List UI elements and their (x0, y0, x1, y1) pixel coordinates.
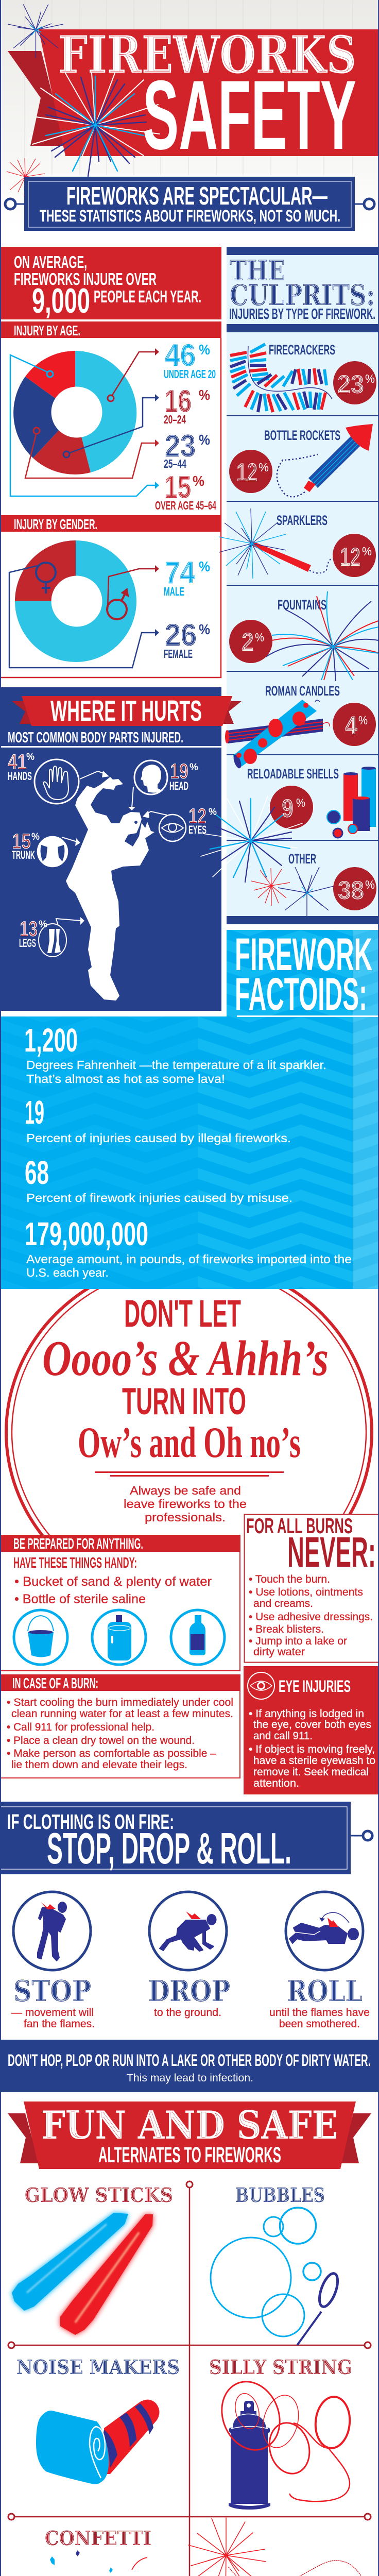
badge: 12 percent sparklers: 12 (340, 543, 360, 571)
panel: in case of a burn: • Place a clean dry towel on the wound. (7, 1735, 195, 1747)
panel: on average stat: FIREWORKS INJURE OVER (14, 269, 157, 289)
heading: firework factoids (235, 928, 379, 1020)
factoid: 68 (25, 1154, 292, 1205)
badge: 4 percent: 4 (345, 711, 357, 740)
stat: 15 percent over age 45-64: OVER AGE 45–64 (155, 499, 216, 512)
icon: reloadable shell burst across panels (201, 796, 302, 882)
panel: dirty water warning: This may lead to infection. (127, 2072, 253, 2084)
ribbon: where it hurts: WHERE IT HURTS (50, 694, 202, 727)
panel: on average stat: ON AVERAGE, (14, 252, 87, 272)
panel: injury by age and gender (1, 321, 221, 677)
label: sparklers: SPARKLERS (277, 513, 328, 528)
stat: 16 percent 20-24: % (199, 387, 210, 403)
icon: roman candles (225, 700, 330, 769)
heading: injury by age (1, 321, 221, 338)
callout: eyes 12 percent: EYES (188, 823, 206, 836)
alternative: sparkler finale fireworks (173, 2518, 376, 2576)
banner: stop drop and roll (1, 1802, 372, 1874)
icon: red burst (188, 2518, 266, 2576)
badge: 4 percent: % (358, 714, 368, 727)
alternative: bubbles (211, 2183, 341, 2345)
callout: legs 13 percent: % (39, 919, 47, 930)
stat: 23 percent 25-44: % (199, 432, 210, 448)
panel: on average stat: 9,000 (32, 281, 90, 320)
panel: in case of a burn: • Call 911 for professional help. (7, 1721, 154, 1733)
professionals advice: professionals. (145, 1511, 226, 1524)
alternative: glow sticks: GLOW STICKS (25, 2183, 173, 2207)
icon: sparkler (219, 509, 332, 579)
step: drop: DROP (148, 1974, 230, 2008)
callout: head 19 percent: 19 (170, 759, 188, 783)
badge: 12 percent rockets: 12 (236, 458, 257, 487)
panel: eye injuries: the eye, cover both eyes (253, 1719, 371, 1731)
panel: in case of a burn: clean running water for at least a few minutes. (11, 1708, 233, 1720)
stat: 26 percent female: % (199, 621, 210, 637)
icon: red glow stick (60, 2214, 153, 2335)
callout: legs 13 percent (19, 917, 84, 957)
step: drop: to the ground. (154, 2007, 221, 2019)
label: other: OTHER (288, 851, 316, 867)
icon: male symbol (107, 588, 129, 619)
decorative double ellipse (5, 1289, 373, 1535)
stat: 46 percent under age 20: % (199, 342, 210, 358)
factoid: 179,000,000: Average amount, in pounds, of fireworks imported into the (26, 1252, 352, 1266)
icon: bucket (14, 1610, 67, 1665)
factoid: 19: 19 (25, 1094, 44, 1131)
callout: trunk 15 percent: % (31, 832, 40, 842)
icon: eye ring (248, 1672, 274, 1699)
factoid: 1,200: That’s almost as hot as some lava! (26, 1072, 225, 1086)
alternative: bubbles: BUBBLES (235, 2183, 325, 2207)
callout: eyes 12 percent: % (209, 807, 217, 818)
professionals advice: Always be safe and (130, 1484, 241, 1497)
callout: hands 41 percent (8, 750, 109, 804)
stat: 46 percent under age 20: UNDER AGE 20 (164, 367, 216, 381)
stat: 74 percent male: MALE (164, 585, 184, 598)
stat: 15 percent over age 45-64: % (193, 473, 204, 489)
callout: eyes 12 percent: 12 (188, 804, 206, 828)
badge: 9 percent (270, 786, 313, 829)
panel: for all burns never: dirty water (253, 1646, 305, 1658)
alternatives grid lines (8, 2181, 371, 2576)
icon: party blower (36, 2400, 160, 2484)
headline text: DON'T LET (124, 1292, 241, 1335)
alternative: silly string (209, 2355, 352, 2510)
professionals advice: leave fireworks to the (124, 1497, 247, 1511)
callout lines: gender (9, 565, 159, 668)
label: firecrackers: FIRECRACKERS (269, 342, 335, 358)
step: drop (148, 1892, 230, 2019)
stat: 74 percent male (164, 555, 210, 598)
badge: 12 percent sparklers (333, 534, 376, 577)
badge: 2 percent: % (255, 631, 264, 644)
callout: hands 41 percent: 41 (8, 750, 27, 774)
roll figure (289, 1912, 359, 1943)
callout: head 19 percent (128, 759, 198, 810)
callout: legs 13 percent: 13 (20, 917, 38, 941)
silhouette: injured person (66, 777, 154, 1001)
panel: eye injuries: • If anything is lodged in (249, 1708, 364, 1720)
banner text (40, 182, 340, 225)
heading: injury by gender (1, 515, 221, 532)
heading: the culprits (229, 254, 375, 323)
callout: hands 41 percent: HANDS (8, 770, 32, 783)
header wood planks (0, 0, 379, 227)
label: fountains: FOUNTAINS (278, 597, 326, 613)
factoid: 19: Percent of injuries caused by illegal fireworks. (26, 1131, 291, 1145)
banner: spectacular statistics (5, 177, 374, 231)
panel: be prepared for anything: BE PREPARED FOR ANYTHING. (13, 1536, 143, 1552)
factoid: 68: 68 (25, 1154, 49, 1191)
stat: 15 percent over age 45-64 (155, 470, 216, 512)
callout: trunk 15 percent: 15 (12, 829, 31, 853)
icon: large firework burst over ribbon (32, 73, 160, 176)
callout: trunk 15 percent: TRUNK (12, 849, 35, 861)
stat: 26 percent female: 26 (165, 618, 197, 652)
badge: 9 percent: 9 (282, 794, 294, 823)
panel: for all burns never: • Use adhesive dressings. (249, 1611, 373, 1623)
icon: saline bottle (171, 1610, 225, 1665)
icon: blue glow stick (12, 2213, 128, 2311)
icon: confetti pieces (19, 2550, 170, 2576)
dotted trail (197, 2561, 376, 2576)
callout: trunk 15 percent (12, 829, 80, 867)
stat: 26 percent female (164, 618, 210, 660)
alternative: noise makers (16, 2355, 180, 2484)
stat: 15 percent over age 45-64: 15 (164, 470, 191, 504)
step: roll (269, 1892, 370, 2030)
badge: 12 percent rockets: % (259, 461, 269, 474)
panel: eye injuries (244, 1666, 379, 1794)
ribbon: fun and safe: FUN AND SAFE (41, 2103, 338, 2148)
factoid: 19 (25, 1094, 291, 1145)
factoid: 179,000,000 (25, 1215, 352, 1279)
icon: silly string loops (212, 2373, 352, 2501)
badge: 23 percent: 23 (337, 370, 364, 399)
icon: bubbles and wand (211, 2208, 341, 2345)
stat: 23 percent 25-44: 23 (165, 429, 196, 463)
badge: 12 percent sparklers: % (362, 545, 372, 558)
panel: for all burns never: • Use lotions, ointments (249, 1586, 363, 1598)
panel: be prepared for anything: HAVE THESE THINGS HANDY: (13, 1555, 137, 1571)
icon: other fireworks (251, 867, 334, 916)
factoid: 179,000,000: U.S. each year. (26, 1266, 109, 1279)
factoid: 1,200 (24, 1022, 326, 1086)
icon: female symbol (36, 563, 56, 594)
badge: 23 percent (333, 361, 376, 404)
headline text: TURN INTO (122, 1381, 246, 1422)
heading: the culprits: THE (230, 254, 285, 287)
panel: eye injuries: • If object is moving freely, (249, 1743, 375, 1755)
icon: firecrackers (230, 344, 332, 412)
callout: head 19 percent: HEAD (169, 779, 188, 792)
heading: injury by gender: INJURY BY GENDER. (14, 516, 97, 532)
badge: 12 percent rockets (229, 450, 272, 493)
panel: where it hurts (0, 687, 242, 1011)
panel: be prepared for anything: • Bucket of sand & plenty of water (14, 1574, 212, 1589)
callout: hands 41 percent: % (26, 752, 35, 762)
factoid: 179,000,000: 179,000,000 (25, 1215, 148, 1252)
panel: for all burns never: • Touch the burn. (249, 1573, 330, 1585)
panel: in case of a burn: lie them down and elevate their legs. (11, 1759, 187, 1771)
stat: 16 percent 20-24 (164, 384, 210, 426)
step: stop (11, 1892, 95, 2030)
panel: eye injuries: attention. (253, 1777, 299, 1789)
step: stop: — movement will (11, 2007, 94, 2019)
stat: 26 percent female: FEMALE (164, 647, 193, 660)
icon: fountain burst (266, 591, 378, 681)
badge: 2 percent: 2 (242, 628, 254, 656)
factoid: 1,200: Degrees Fahrenheit —the temperature of a lit sparkler. (26, 1058, 326, 1072)
icon: bottle rocket (277, 424, 373, 497)
panel: firework factoids (1, 928, 379, 1289)
step: roll: been smothered. (279, 2018, 360, 2030)
culprits header bars (227, 247, 379, 924)
step: roll: ROLL (287, 1974, 363, 2008)
stat: 46 percent under age 20: 46 (165, 338, 196, 372)
panel: in case of a burn (1, 1674, 240, 1778)
panel: be prepared for anything: • Bottle of sterile saline (14, 1592, 146, 1606)
panel: eye injuries: have a sterile eyewash to (253, 1755, 375, 1767)
stop figure (38, 1902, 67, 1961)
panel: in case of a burn: • Make person as comfortable as possible – (7, 1748, 216, 1759)
alternative: confetti (19, 2527, 170, 2576)
banner: stop drop and roll: IF CLOTHING IS ON FIRE: (7, 1810, 174, 1834)
panel: the culprits (219, 247, 379, 924)
subheading: body parts: MOST COMMON BODY PARTS INJURED. (8, 730, 183, 746)
heading: injury by age: INJURY BY AGE. (14, 323, 80, 338)
badge: 2 percent (229, 620, 272, 663)
badge: 38 percent (333, 867, 376, 910)
alternative: glow sticks (12, 2183, 173, 2335)
factoid: 68: Percent of firework injuries caused by misuse. (26, 1191, 292, 1205)
panel: for all burns never: and creams. (253, 1598, 313, 1609)
headline text (42, 1292, 329, 1477)
factoid: 1,200: 1,200 (24, 1022, 78, 1059)
step: roll: until the flames have (269, 2007, 370, 2019)
chart: gender donut (15, 540, 136, 662)
panel: on average stat (1, 247, 221, 320)
stat: 23 percent 25-44: 25–44 (164, 457, 186, 470)
badge: 23 percent: % (365, 372, 375, 385)
stat: 16 percent 20-24: 16 (164, 384, 192, 418)
badge: 38 percent: 38 (338, 876, 364, 905)
panel: for all burns never: • Jump into a lake or (249, 1635, 347, 1647)
icon: water jug (92, 1610, 146, 1665)
panel: dirty water warning (0, 2040, 379, 2092)
panel: eye injuries: remove it. Seek medical (253, 1766, 369, 1778)
stat: 16 percent 20-24: 20–24 (164, 413, 186, 426)
ribbon: fun and safe (8, 2102, 371, 2169)
panel: don't let oooo's and ahhh's (5, 1289, 373, 1535)
step: stop: STOP (13, 1974, 91, 2008)
alternative: noise makers: NOISE MAKERS (16, 2355, 180, 2379)
icon: spray can (229, 2401, 270, 2510)
callout: head 19 percent: % (190, 762, 198, 773)
badge: 38 percent: % (365, 878, 375, 891)
panel: be prepared for anything (1, 1535, 240, 1671)
callout: legs 13 percent: LEGS (19, 937, 36, 950)
alternative: confetti: CONFETTI (45, 2527, 151, 2550)
panel: for all burns never: • Break blisters. (249, 1623, 324, 1635)
icon: small navy firework top left (8, 5, 63, 58)
chart: age donut (13, 351, 136, 474)
stat: 74 percent male: % (199, 558, 210, 574)
badge: 9 percent: % (296, 796, 305, 809)
panel: eye injuries: and call 911. (253, 1730, 313, 1742)
panel: in case of a burn: • Start cooling the burn immediately under cool (7, 1697, 233, 1708)
badge: 4 percent (333, 703, 376, 746)
step: stop: fan the flames. (24, 2018, 95, 2030)
panel: for all burns never (244, 1514, 379, 1662)
banner connector (351, 1831, 372, 1840)
callout lines: age (10, 348, 159, 496)
icon: reloadable shells (327, 767, 376, 838)
subheading: body parts (1, 730, 221, 748)
stat: 46 percent under age 20 (164, 338, 216, 381)
callout: eyes 12 percent (143, 804, 217, 841)
ribbon: where it hurts (12, 694, 242, 727)
stat: 23 percent 25-44 (164, 429, 210, 470)
stat: 74 percent male: 74 (165, 555, 196, 590)
panel: on average stat: PEOPLE EACH YEAR. (94, 287, 201, 306)
alternative: silly string: SILLY STRING (209, 2355, 352, 2379)
banner connectors (5, 199, 374, 209)
panel: in case of a burn: IN CASE OF A BURN: (12, 1675, 98, 1692)
title ribbon (8, 25, 379, 170)
icon: red firework (7, 158, 45, 197)
professionals advice (124, 1484, 247, 1524)
drop figure (160, 1911, 216, 1951)
